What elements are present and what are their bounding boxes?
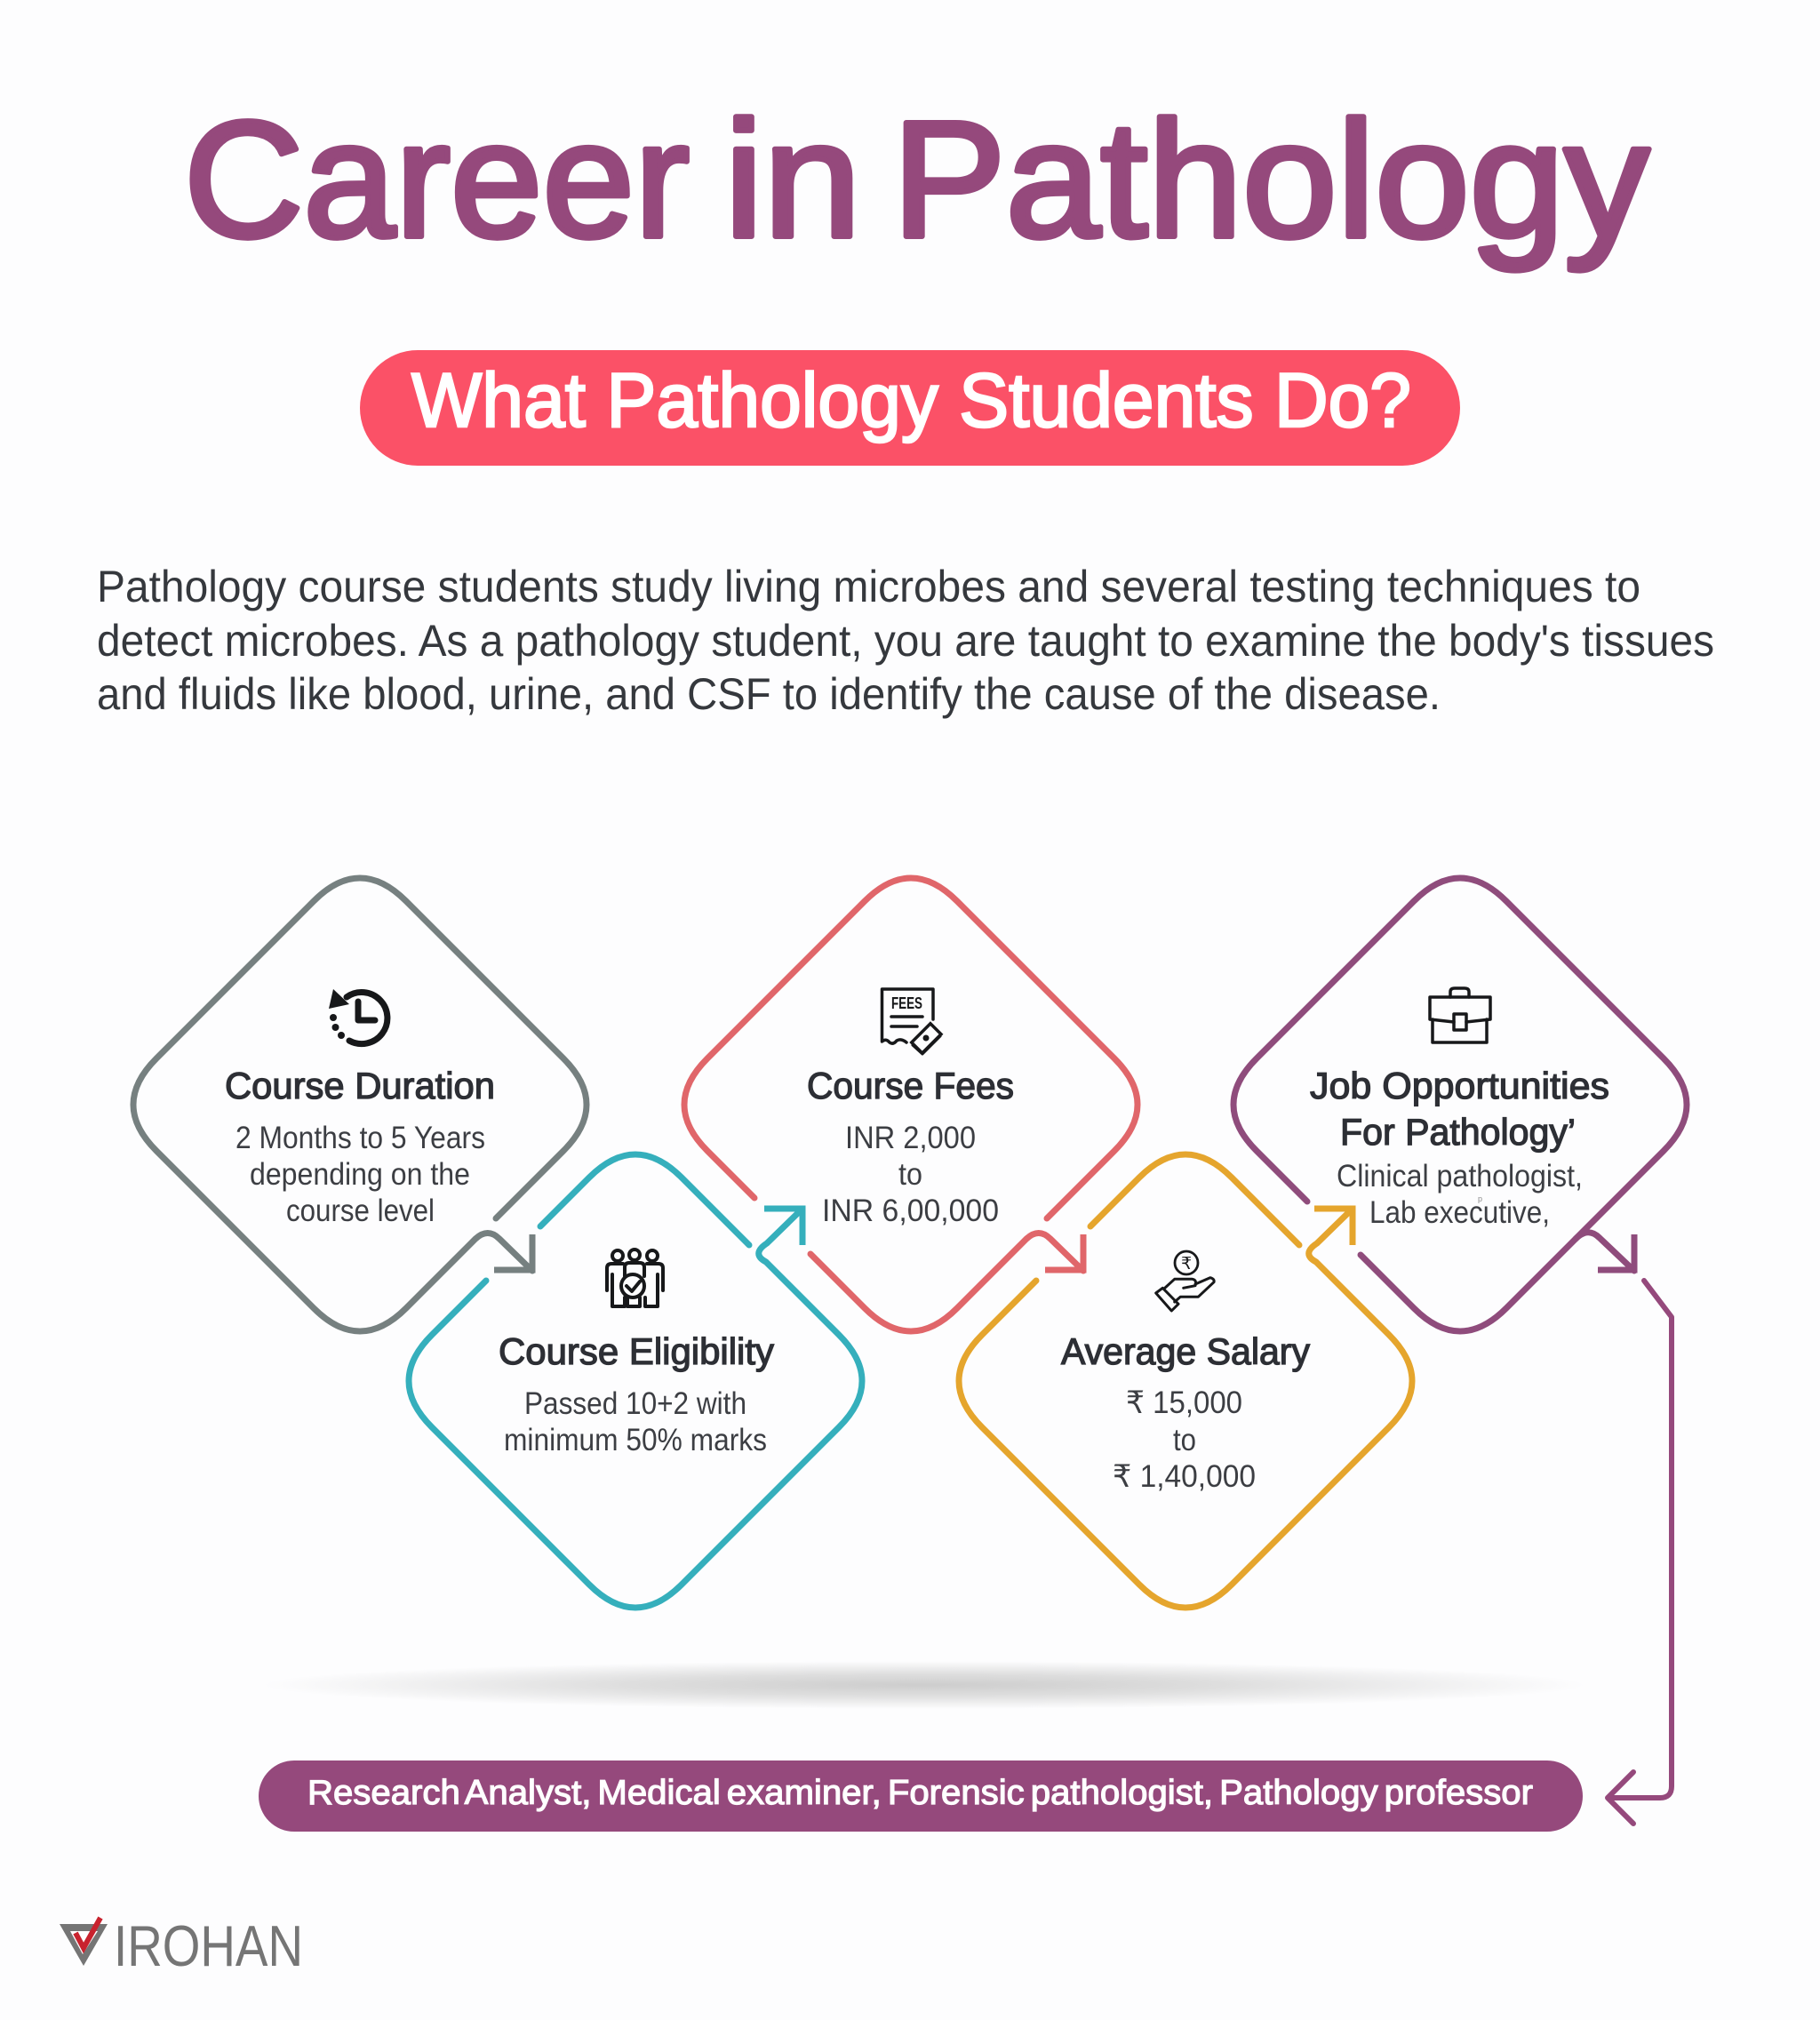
- title: Career: [184, 88, 690, 272]
- text: salary detail: [1113, 1385, 1256, 1494]
- subtitle pill: [360, 350, 1460, 466]
- text: job detail: p: [1478, 1194, 1482, 1203]
- purple diamond outline with arrow: [1233, 878, 1687, 1331]
- title: in: [724, 88, 861, 272]
- panel: course duration: [133, 878, 587, 1331]
- logo wordmark: IROHAN: [114, 1913, 303, 1978]
- text: duration detail: 2 Months to 5 Years: [235, 1121, 485, 1155]
- intro paragraph: detect microbes. As a pathology student, you are taught to examine the body's tissues: [97, 616, 1714, 666]
- icon: hand holding rupee coin: ₹: [1181, 1255, 1192, 1273]
- intro paragraph: [97, 562, 1714, 719]
- title: Pathology: [892, 88, 1649, 272]
- text: duration detail: [235, 1121, 485, 1228]
- text: eligibility detail: [504, 1386, 767, 1457]
- yellow diamond outline with arrow: [959, 1154, 1412, 1608]
- heading: job opportunities: Job Opportunities: [1310, 1065, 1609, 1106]
- text: job detail: Clinical pathologist,: [1337, 1159, 1583, 1194]
- icon: people with check badge: [607, 1250, 663, 1306]
- heading: job opportunities: [1310, 1065, 1609, 1153]
- ground shadow: [262, 1661, 1586, 1709]
- text: salary detail: ₹ 15,000: [1126, 1385, 1242, 1420]
- logo mark: [60, 1918, 108, 1966]
- text: job detail: Lab executive,: [1369, 1195, 1550, 1230]
- connector arrow to job list: [1608, 1281, 1672, 1824]
- heading: course eligibility: Course Eligibility: [499, 1330, 774, 1372]
- panel: average salary: [959, 1154, 1412, 1608]
- intro paragraph: Pathology course students study living microbes and several testing techniques to: [97, 562, 1640, 611]
- text: fees detail: INR 2,000: [845, 1121, 976, 1155]
- text: eligibility detail: Passed 10+2 with: [524, 1386, 746, 1421]
- intro paragraph: and fluids like blood, urine, and CSF to identify the cause of the disease.: [97, 669, 1441, 719]
- text: fees detail: [822, 1121, 999, 1228]
- text: duration detail: depending on the: [250, 1157, 470, 1192]
- icon: fees receipt: FEES: [891, 994, 922, 1012]
- icon: briefcase: [1430, 988, 1490, 1042]
- text: duration detail: course level: [286, 1194, 435, 1228]
- heading: course duration: Course Duration: [225, 1065, 495, 1106]
- heading: course fees: Course Fees: [807, 1065, 1014, 1106]
- icon: hand holding rupee coin: [1156, 1251, 1214, 1311]
- icon: fees receipt: [882, 989, 941, 1054]
- panel: job opportunities: [1233, 878, 1687, 1331]
- teal diamond outline with arrow: [409, 1154, 862, 1608]
- icon: clock with history arrow: [329, 989, 387, 1044]
- grey diamond outline with arrow: [133, 878, 587, 1331]
- text: salary detail: ₹ 1,40,000: [1113, 1459, 1256, 1494]
- text: fees detail: INR 6,00,000: [822, 1194, 999, 1228]
- text: salary detail: to: [1173, 1423, 1196, 1457]
- heading: job opportunities: For Pathology’: [1340, 1111, 1576, 1153]
- text: job detail: [1337, 1159, 1583, 1230]
- subtitle text: What Pathology Students Do?: [411, 358, 1411, 443]
- heading: average salary: Average Salary: [1061, 1330, 1310, 1372]
- panel: course fees: [684, 878, 1138, 1331]
- job list text: Research Analyst, Medical examiner, Forensic pathologist, Pathology professor: [307, 1774, 1533, 1812]
- title: [184, 88, 1649, 272]
- panel: course eligibility: [409, 1154, 862, 1608]
- text: fees detail: to: [898, 1157, 922, 1192]
- logo: Virohan: [60, 1913, 303, 1978]
- job list pill: [259, 1761, 1583, 1832]
- text: eligibility detail: minimum 50% marks: [504, 1423, 767, 1457]
- red diamond outline with arrow: [684, 878, 1138, 1331]
